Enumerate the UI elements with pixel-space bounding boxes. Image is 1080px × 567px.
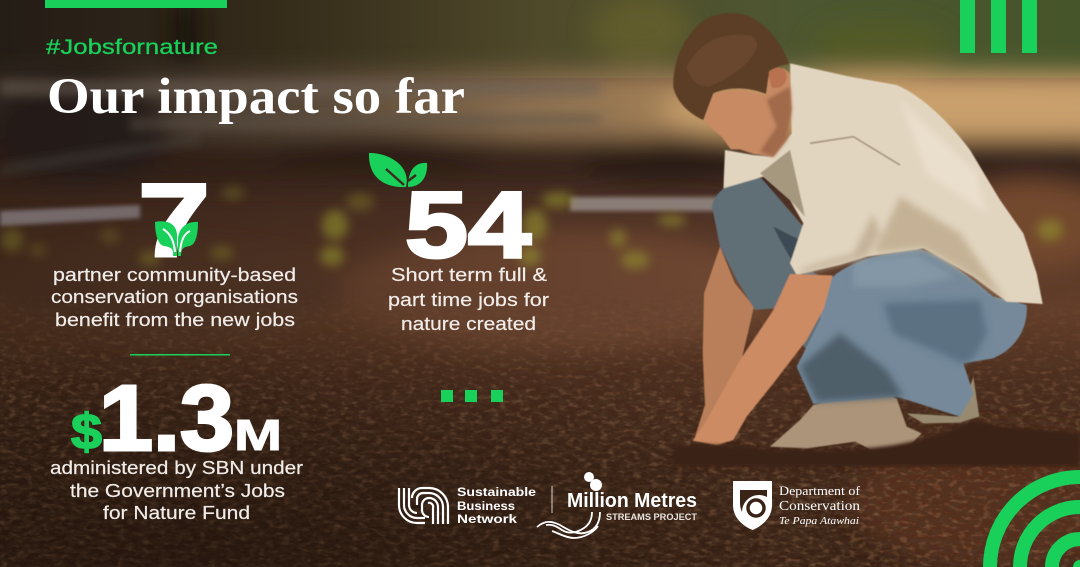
- caption: benefit from the new jobs: [55, 310, 295, 330]
- front arm: [693, 274, 833, 445]
- logo: Department of Conservation: Department of: [779, 483, 861, 498]
- logo: Million Metres Streams Project: [537, 472, 698, 538]
- caption: conservation organisations: [51, 287, 298, 307]
- number 54: 54: [405, 172, 531, 277]
- icon: two leaves: [369, 153, 427, 187]
- face and neck: [703, 68, 792, 157]
- caption: nature created: [401, 314, 536, 334]
- logo: Million Metres Streams Project: Million Metres: [567, 490, 697, 512]
- lower jeans: [797, 248, 1027, 417]
- caption: [51, 265, 298, 330]
- M suffix: M: [234, 411, 282, 460]
- caption: Short term full &: [391, 265, 547, 285]
- ear: [768, 67, 787, 88]
- caption: for Nature Fund: [103, 503, 250, 523]
- logo: Department of Conservation: [733, 481, 861, 530]
- stat: $1.3M funding: [50, 366, 303, 523]
- shoes: [770, 392, 922, 451]
- logo: Department of Conservation: Conservation: [779, 499, 860, 514]
- stat: 7 partner organisations: [51, 163, 298, 330]
- shirt: [723, 63, 1043, 304]
- number 1.3: 1.3: [99, 366, 234, 470]
- title: Our impact so far: [47, 69, 465, 125]
- caption: partner community-based: [53, 265, 296, 285]
- caption: [50, 458, 303, 523]
- left thigh in jeans: [712, 178, 840, 350]
- logo: Sustainable Business Network: [399, 485, 536, 526]
- caption: [388, 265, 549, 334]
- divider line: [130, 354, 230, 356]
- caption: the Government’s Jobs: [70, 481, 285, 501]
- caption: administered by SBN under: [50, 458, 303, 478]
- soft pale poles: [0, 197, 720, 226]
- logo: Sustainable Business Network: Business: [457, 499, 515, 513]
- blurred seedlings: [1, 186, 1063, 269]
- hashtag: #Jobsfornature: [46, 36, 218, 59]
- hair: [673, 13, 789, 120]
- caption: part time jobs for: [388, 290, 549, 310]
- logo divider: [552, 486, 553, 513]
- logo: Sustainable Business Network: Sustainable: [457, 485, 536, 499]
- top-right green bars: [960, 0, 1037, 53]
- top-left green bar: [45, 0, 227, 8]
- dollar sign: $: [71, 404, 102, 460]
- foreground mulch around hands and shoes: [673, 420, 1080, 467]
- icon: seedling on the 7: [155, 221, 198, 256]
- photo: man kneeling in soil: [673, 13, 1080, 467]
- stat: 54 jobs: [369, 153, 549, 334]
- logo: Sustainable Business Network: Network: [457, 512, 517, 526]
- back arm: [695, 247, 754, 442]
- number 7: 7: [138, 163, 210, 279]
- three dots: [441, 390, 503, 402]
- logo: Department of Conservation: Te Papa Atawhai: [779, 515, 859, 527]
- logo: Million Metres Streams Project: STREAMS PROJECT: [606, 512, 698, 522]
- icon: concentric green arcs: [990, 477, 1080, 567]
